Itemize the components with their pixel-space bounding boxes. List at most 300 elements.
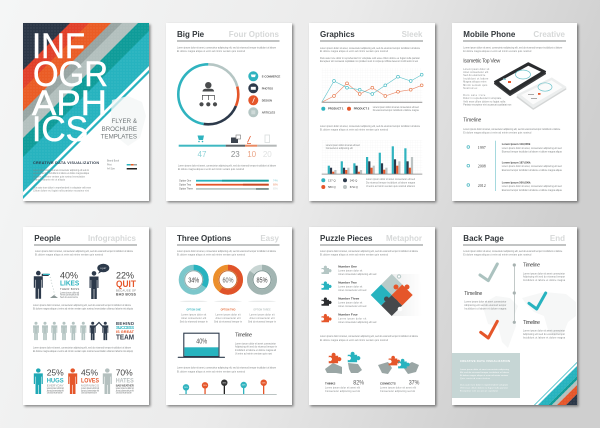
icon: check teal (529, 293, 546, 309)
bar chart legend: 67H Q (350, 185, 359, 189)
heading: End (550, 234, 565, 243)
cover title: OGR (33, 55, 108, 94)
line chart (322, 68, 423, 103)
timeline entries: Lorem ipsum dolor sit amet, consectetur adipiscing elit sed (502, 165, 562, 168)
cover body text: eiusmod tempor incididunt ut labore et dolore magna aliqua (33, 172, 90, 175)
stat: 45% loves (68, 368, 99, 395)
cover title: INF (32, 27, 85, 66)
timeline entry one: Incididunt ut labore et dolore magna (523, 279, 566, 282)
ring: 34% (181, 267, 206, 292)
heading: Back Page (463, 234, 504, 243)
team statement: BEHIND (116, 321, 134, 326)
puzzle diamond (371, 274, 422, 316)
intro text: Et dolore magna aliqua ut enim ad minim veniam quis nostrud (463, 50, 532, 53)
stat: 70% hates (103, 368, 134, 395)
timeline entry three (523, 320, 566, 339)
ring: 85% (250, 267, 274, 292)
options bars (179, 180, 279, 191)
heading (177, 30, 280, 42)
heading: Creative (533, 30, 566, 39)
stat: 25% hugs: Sed do eiusmod te (47, 392, 63, 395)
stat: 45% loves: MORNINGS (81, 384, 99, 388)
legend glyphs (251, 74, 256, 114)
piece list: Amet consectetur adipiscing elit sed (338, 321, 377, 324)
timeline entries: Lorem Ipsum 187,000k (502, 160, 531, 164)
timeline entries: Eiusmod tempor incididunt ut labore et dolore magna aliqua (502, 169, 562, 172)
info box: Velit esse cillum dolore eu fugiat nulla pariatur (460, 386, 508, 389)
heading: People (34, 234, 61, 243)
timeline text: Adipiscing elit sed do eiusmod tempor in (235, 346, 278, 349)
line chart legend (321, 107, 370, 111)
phone description (463, 68, 512, 107)
timeline text: Ut enim ad minim veniam quis nost (235, 352, 272, 356)
bar chart note: Ut enim ad minim veniam quis nostrud ullamco (366, 185, 416, 188)
heading: Graphics (320, 30, 355, 39)
heading: Easy (260, 234, 280, 243)
panel: cover (22, 22, 152, 204)
piece list: Lorem ipsum dolor sit (338, 318, 367, 320)
para (320, 335, 419, 342)
timeline text: Lorem ipsum dolor sit amet, consectetur adipiscing elit, sed do eiusmod tempor incididunt ut labore (463, 128, 561, 131)
pin timeline: 20% (203, 385, 207, 387)
intro text (177, 250, 277, 256)
row of people (33, 322, 108, 340)
intro text (35, 250, 134, 256)
heading: Four Options (229, 30, 280, 39)
panel: big pie (166, 23, 292, 201)
legend: ARTICLES (262, 110, 275, 114)
timeline entry one: Adipiscing elit sed do eiusmod tempor (523, 276, 565, 279)
stat: connects (380, 379, 420, 393)
panel: three options (166, 227, 292, 405)
laptop: 40% (196, 338, 207, 346)
info box: Lorem ipsum dolor sit amet consectetur adipiscing (460, 368, 510, 371)
para (33, 346, 134, 353)
legend (248, 71, 281, 117)
info box: Elit sed do eiusmod tempor incididunt ut labore (460, 371, 510, 374)
intro text: Duis aute irure dolor in reprehenderit in voluptate velit esse cillum dolore eu fugiat nulla pariatur (320, 57, 420, 60)
bar chart note (366, 178, 416, 188)
donut chart (178, 64, 238, 124)
para (33, 304, 134, 310)
heading (463, 234, 566, 246)
icon: organisation (199, 82, 217, 106)
cover subtitle (101, 118, 138, 140)
stat: 70% hates: 70% (116, 368, 133, 378)
bar chart legend (321, 178, 359, 189)
stat: 70% hates: HATES (116, 377, 134, 384)
stat: 45% loves: Sed do eiusmod te (81, 392, 98, 395)
ring: 34%: 34% (188, 277, 199, 284)
mid text: Et dolore magna aliqua ut enim ad minim veniam quis nostrud (178, 168, 245, 171)
timeline entry two: Lorem ipsum dolor sit amet consectetur (464, 300, 507, 304)
line chart legend: PRODUCT 1 (328, 107, 344, 111)
legend: PHOTOS (262, 86, 273, 90)
laptop (178, 333, 225, 358)
piece list: Number Two (338, 281, 357, 285)
ring: 60% (216, 267, 240, 292)
timeline entry two: Incididunt ut labore et dolore magna (464, 307, 507, 310)
stat: thinks: Consectetur adipiscing sed do (325, 390, 361, 393)
timeline entries: Eiusmod tempor incididunt ut labore et dolore magna aliqua (502, 189, 562, 192)
figure: pointing person (34, 271, 58, 299)
intro text: Excepteur sint occaecat cupidatat non proident sunt in culpa qui officia deserunt mollit anim id est (320, 60, 418, 63)
timeline entry two: Timeline (464, 291, 483, 297)
cover body text: Lorem ipsum dolor sit amet consectetur adipiscing elit sed do (33, 169, 90, 172)
info box: Duis aute irure dolor in reprehenderit voluptate (460, 383, 509, 386)
stat: 40% likes: LIKES (60, 279, 79, 288)
icons row (198, 135, 270, 144)
timeline entries: Lorem ipsum dolor sit amet, consectetur adipiscing elit sed (502, 185, 562, 188)
option labels (186, 310, 271, 312)
intro text (463, 250, 563, 256)
stat: 70% hates: Amet consectetur elit (116, 389, 134, 392)
hands holding pieces: connects (378, 356, 419, 374)
option text: Lorem ipsum dolor sit (181, 314, 207, 316)
figure: person quitting (90, 264, 109, 299)
info box: CREATIVE DATA VISUALIZATION (460, 359, 510, 363)
timeline entry three: Incididunt ut labore et dolore magna (523, 336, 566, 339)
timeline heading: Timeline (235, 333, 252, 339)
para: Lorem ipsum dolor sit amet, consectetur adipiscing elit, sed do eiusmod tempor incididunt ut labore (33, 304, 132, 307)
stat: 70% hates: Sed do eiusmod te (116, 392, 132, 395)
cover details and colour swatches: Brand Book (107, 160, 120, 162)
stat: 45% loves: Lorem ipsum dolor sit (81, 387, 99, 390)
option labels: OPTION THREE (253, 310, 271, 312)
piece list: Number Four (338, 313, 359, 317)
cover subtitle: FLYER & (112, 118, 138, 125)
panel: back page (452, 227, 577, 405)
bar chart: Lorem ipsum dolor sit amet elit sed (326, 144, 360, 147)
cover title: ICS (32, 110, 88, 149)
piece list: Lorem ipsum dolor sit (338, 286, 363, 288)
timeline text: Incididunt ut labore et dolore magna ali (235, 349, 276, 352)
stat: connects: Lorem ipsum dolor sit amet elit (380, 386, 416, 389)
stat: 40% likes: Lorem ipsum dolor sit (60, 291, 79, 294)
cover strapline: CREATIVE DATA VISUALIZATION (33, 161, 99, 165)
option text: Amet consectetur elit (250, 317, 275, 320)
heading (34, 234, 137, 246)
info box: Quis nostrud exercitation (460, 377, 491, 380)
ring shadows (180, 301, 276, 302)
timeline years (467, 145, 486, 188)
stat: connects: Consectetur adipiscing sed do (380, 390, 416, 393)
piece list: Number One (338, 265, 357, 269)
stat: 40% likes: Amet consectetur elit (60, 294, 79, 297)
middle text: Lorem ipsum dolor sit amet, consectetur adipiscing elit, sed do eiusmod tempor incididunt ut labore (320, 125, 421, 128)
phone description: Lorem ipsum dolor sit (463, 68, 490, 71)
intro text: Lorem ipsum dolor sit amet, consectetur adipiscing elit, sed do eiusmod tempor incididunt ut labore (320, 250, 419, 253)
panel: mobile phone (452, 23, 577, 201)
timeline line (494, 141, 497, 191)
timeline entry one: Lorem ipsum dolor sit amet consectetur (523, 272, 565, 275)
piece list: Lorem ipsum dolor sit (338, 302, 363, 304)
cover details and colour swatches: A4 Size (107, 168, 116, 170)
subheading: Isometric Top View (463, 59, 501, 65)
stat: 40% likes (60, 270, 79, 299)
values: 47 (198, 150, 207, 159)
phone description: Minim veniam quis (463, 85, 488, 87)
para: Et dolore magna aliqua ut enim ad minim veniam quis nostrud (177, 370, 246, 373)
timeline entries: Eiusmod tempor incididunt ut labore et dolore magna aliqua (502, 150, 562, 154)
panel: puzzle pieces (309, 227, 435, 405)
timeline text: Et dolore magna aliqua ut enim ad minim veniam quis nostrud (463, 132, 532, 134)
option text: Amet consectetur elit (216, 317, 241, 320)
options bars: Option Three (179, 188, 194, 191)
para: Lorem ipsum dolor sit amet, consectetur adipiscing elit, sed do eiusmod tempor incididunt ut labore (320, 335, 419, 338)
legend: DESIGN (262, 98, 272, 102)
figure: person quitting: I QUIT (100, 268, 107, 270)
timeline text (235, 342, 278, 356)
line chart note: Lorem ipsum dolor sit amet consectetur elit sed (373, 106, 419, 109)
intro text: Et dolore magna aliqua ut enim ad minim veniam quis nostrud (320, 50, 389, 53)
stat: 22% quit: QUIT (116, 279, 136, 290)
piece list: Number Three (338, 297, 360, 301)
intro text: Et dolore magna aliqua ut enim ad minim veniam quis nostrud (463, 254, 532, 256)
heading: Big Pie (177, 30, 205, 39)
cover diagonal stripes (23, 23, 149, 199)
phone description: Amet consectetur elit (463, 71, 489, 74)
isometric dark phone (495, 63, 545, 95)
intro text (320, 250, 419, 256)
stat: 45% loves: 45% (81, 368, 98, 378)
team statement: TEAM (116, 335, 134, 342)
values (198, 150, 272, 159)
intro text: Lorem ipsum dolor sit amet, consectetur adipiscing elit, sed do eiusmod tempor incididunt ut labore (463, 46, 563, 50)
intro text: Lorem ipsum dolor sit amet, consectetur adipiscing elit, sed do eiusmod tempor incididunt ut labore (463, 250, 563, 253)
panel: graphics (309, 23, 435, 201)
world map (482, 292, 576, 348)
timeline years: 1997 (478, 145, 486, 150)
stat: thinks (325, 379, 364, 393)
timeline entry three: Lorem ipsum dolor sit amet consectetur (523, 330, 565, 332)
intro text: Lorem ipsum dolor sit amet, consectetur adipiscing elit, sed do eiusmod tempor incididunt ut labore (177, 250, 277, 253)
bar chart note: Lorem ipsum dolor sit amet consectetur elit sed (366, 178, 416, 181)
stat: 25% hugs: HUGS (47, 377, 64, 384)
intro text: Et dolore magna aliqua ut enim ad minim veniam quis nostrud (177, 254, 246, 256)
line chart note (373, 106, 419, 112)
stat: connects: CONNECTS (380, 381, 396, 385)
isometric white phone (517, 78, 566, 109)
stat: 25% hugs (34, 368, 64, 395)
cover body text: Cillum dolore eu fugiat nulla pariatur excepteur sint (33, 190, 89, 193)
para: Et dolore magna aliqua ut enim ad minim veniam quis nostrud exercitation ullamco laboris nisi aliquip (33, 350, 134, 353)
cover subtitle: BROCHURE (102, 126, 137, 133)
phone description: Dolor in reprehenderit voluptate (463, 97, 502, 100)
piece list: Amet consectetur adipiscing elit sed (338, 273, 377, 276)
piece list: Amet consectetur elit sed (338, 289, 367, 292)
bar chart: Consectetur adipiscing elit (326, 147, 353, 150)
timeline entry one (523, 263, 566, 282)
pin timeline: 50% (262, 382, 266, 384)
vertical timeline (513, 263, 516, 324)
option text: Lorem ipsum dolor sit (250, 314, 275, 316)
timeline entries: Lorem Ipsum 119,000k (502, 142, 531, 146)
icon: check orange (481, 321, 497, 338)
bar chart legend: 240 Q (350, 178, 358, 182)
info box (452, 353, 520, 398)
phone description: Magna aliqua enim (463, 82, 486, 84)
option labels: OPTION TWO (221, 310, 236, 312)
para: Lorem ipsum dolor sit amet, consectetur adipiscing elit, sed do eiusmod tempor incididunt ut labore (33, 346, 132, 349)
bar chart note: Do eiusmod tempor incididunt ut labore magna (366, 182, 416, 184)
phone description: Pariatur excepteur sint occaecat cupidatat non (463, 104, 512, 107)
pin timeline (179, 380, 277, 395)
option text (180, 314, 277, 324)
para: Et dolore magna aliqua ut enim ad minim veniam quis nostrud (320, 339, 389, 342)
stat: 70% hates: BAD WEATHER (116, 384, 134, 388)
stat: 22% quit: 22% (116, 270, 134, 280)
heading: Mobile Phone (463, 30, 516, 39)
line chart legend: PRODUCT 2 (354, 107, 370, 111)
stat: 25% hugs: EVERYDAY (47, 384, 64, 388)
timeline entries: Lorem ipsum dolor sit amet, consectetur adipiscing elit sed (502, 147, 562, 150)
bar chart (322, 140, 422, 174)
piece list (322, 265, 377, 324)
intro text (463, 46, 563, 53)
cover body text: Ullamco laboris nisi ut aliquip (33, 178, 66, 181)
phone description: Duis aute irure (463, 94, 486, 97)
stat: 25% hugs: 25% (47, 368, 64, 378)
options bars: 85% (273, 188, 279, 191)
timeline entry three: Timeline (523, 320, 540, 326)
cover title: APH (32, 84, 107, 123)
stat: 40% likes: THEIR BOSS (60, 287, 79, 291)
ring: 60%: 60% (222, 277, 234, 284)
corner stripes (534, 362, 577, 405)
pin timeline: 30% (222, 382, 227, 384)
stat: 70% hates: Lorem ipsum dolor sit (116, 387, 134, 390)
timeline text (463, 128, 561, 134)
intro text: Et dolore magna aliqua ut enim ad minim veniam quis nostrud (177, 50, 246, 53)
stat: 22% quit: BAD BOSS (116, 293, 137, 297)
stat: 40% likes: Sed do eiusmod te (60, 296, 79, 299)
heading (320, 234, 423, 246)
icon: check grey (480, 264, 497, 281)
timeline entry one: Timeline (523, 263, 540, 269)
options bars: Option One (179, 180, 192, 182)
stat: connects: 37% (409, 379, 420, 386)
info box: Et dolore magna aliqua ut enim ad minim veniam (460, 374, 508, 377)
timeline heading: Timeline (463, 118, 482, 124)
options bars: Option Two (179, 184, 192, 186)
bar chart legend: 580 Q (328, 185, 336, 189)
timeline entry two: Adipiscing elit sed do eiusmod tempor (464, 304, 507, 307)
heading: Three Options (177, 234, 232, 243)
team statement: IS GREAT (116, 330, 135, 334)
intro text: Et dolore magna aliqua ut enim ad minim veniam quis nostrud (320, 254, 389, 256)
heading: Puzzle Pieces (320, 234, 373, 243)
cover body text: Ut enim ad minim veniam quis nostrud exercitation (33, 175, 86, 178)
stat: 45% loves: Amet consectetur elit (81, 389, 99, 392)
intro text (177, 46, 277, 53)
phone description: Nostrud ex (463, 87, 478, 90)
pin timeline: 40% (242, 385, 246, 387)
team statement: SUCCESS (116, 325, 134, 330)
team statement (116, 321, 135, 342)
cover body text: Duis aute irure dolor in reprehenderit in voluptate velit esse (33, 186, 92, 189)
legend: E-COMMERCE (262, 74, 281, 78)
heading (463, 30, 566, 42)
mid text: Lorem ipsum dolor sit amet, consectetur adipiscing elit, sed do eiusmod tempor incididunt ut labore (178, 164, 277, 168)
panel: people (23, 227, 149, 405)
ring: 85%: 85% (256, 277, 268, 284)
stat: thinks: 82% (353, 379, 364, 386)
stat: 22% quit (116, 270, 137, 297)
middle text: Et dolore magna aliqua ut enim ad minim veniam quis nostrud (320, 129, 389, 132)
intro text: Lorem ipsum dolor sit amet, consectetur adipiscing elit, sed do eiusmod tempor incididunt ut labore (320, 47, 421, 50)
stat: 25% hugs: Lorem ipsum dolor sit (47, 387, 64, 390)
options bars: 74% (273, 180, 279, 182)
mid text (178, 164, 277, 171)
stat: 22% quit: BECAUSE OF (116, 288, 136, 292)
timeline years: 2012 (478, 183, 486, 188)
option text: Amet consectetur elit (181, 317, 207, 320)
option text: Sed do eiusmod tempor in (214, 320, 243, 324)
para: Lorem ipsum dolor sit amet, consectetur adipiscing elit, sed do eiusmod tempor incididunt ut labore (177, 367, 277, 370)
stat: thinks: Lorem ipsum dolor sit amet elit (325, 386, 360, 389)
option text: Sed do eiusmod tempor in (180, 320, 208, 324)
heading: Sleek (402, 30, 423, 39)
heading: Metaphor (386, 234, 422, 243)
option text: Lorem ipsum dolor sit (216, 314, 241, 316)
option labels: OPTION ONE (186, 310, 201, 312)
timeline entries (502, 142, 562, 192)
phone description: Velit esse cillum dolore eu fugiat nulla (463, 100, 506, 103)
piece list: Amet consectetur elit sed (338, 305, 367, 308)
cover details and colour swatches (107, 160, 137, 170)
stat: thinks: THINKS (325, 381, 336, 385)
phone description: Incididunt ut labore (463, 77, 489, 80)
intro text (320, 47, 421, 63)
piece list: Lorem ipsum dolor sit (338, 270, 363, 272)
para (177, 367, 277, 373)
hands holding pieces: thinks (325, 352, 362, 374)
phone description: Sed do eiusmod te (463, 74, 486, 77)
cover details and colour swatches: Print (107, 164, 112, 166)
middle text (320, 125, 421, 132)
heading: Infographics (88, 234, 137, 243)
timeline entries: Lorem Ipsum 500,000k (502, 180, 531, 184)
stat: 25% hugs: Amet consectetur elit (47, 389, 64, 392)
pin timeline: 10% (184, 387, 188, 389)
timeline entry three: Adipiscing elit sed do eiusmod tempor (523, 333, 565, 336)
cover body text (33, 169, 92, 193)
intro text: Et dolore magna aliqua ut enim ad minim veniam quis nostrud (35, 254, 104, 256)
timeline entry two (464, 291, 507, 310)
heading (320, 30, 423, 42)
timeline years: 2008 (478, 164, 486, 168)
bar chart legend: 137 Q (328, 178, 336, 182)
intro text: Lorem ipsum dolor sit amet, consectetur adipiscing elit, sed do eiusmod tempor incididunt ut labore (177, 46, 277, 50)
stat: 45% loves: LOVES (81, 377, 99, 384)
line chart note: Do eiusmod tempor incididunt ut labore magna (373, 109, 419, 112)
world map dots (110, 96, 146, 146)
heading (177, 234, 280, 246)
timeline text: Lorem ipsum dolor sit amet consectetur (235, 342, 276, 345)
stacked bar (179, 145, 277, 147)
para: Et dolore magna aliqua ut enim ad minim veniam quis nostrud exercitation ullamco laboris nisi aliquip (33, 308, 134, 310)
cover subtitle: TEMPLATES (101, 134, 137, 140)
intro text: Lorem ipsum dolor sit amet, consectetur adipiscing elit, sed do eiusmod tempor incididunt ut labore (35, 250, 134, 253)
info box: Excepteur sint occaecat cupidatat (460, 389, 498, 392)
options bars: 60% (273, 184, 279, 186)
values: 23 (231, 150, 240, 159)
option text: Sed do eiusmod tempor in (248, 320, 277, 324)
values: 20 (263, 150, 272, 159)
cover title (32, 27, 108, 149)
stat: 40% likes: 40% (60, 270, 78, 280)
